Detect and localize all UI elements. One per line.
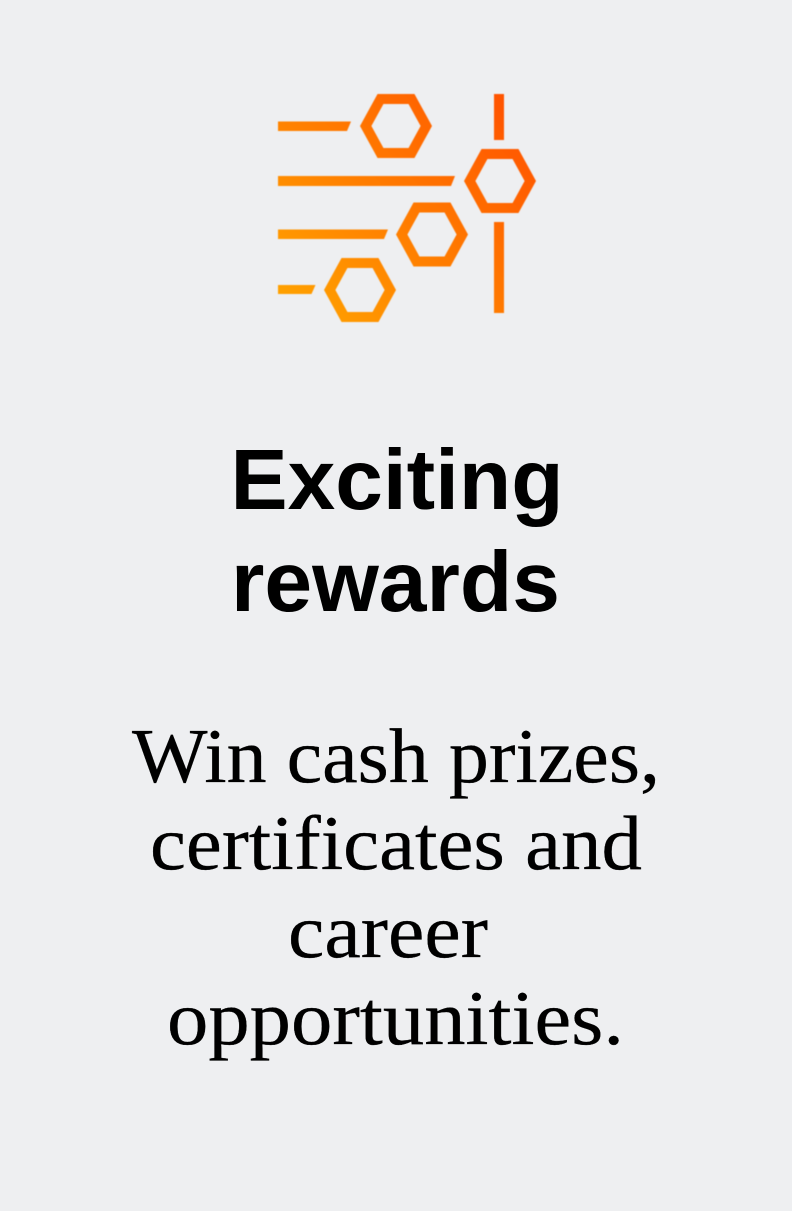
body text: career [288, 888, 488, 974]
body text: opportunities. [167, 975, 624, 1061]
body text: certificates and [150, 800, 642, 886]
body text [132, 713, 660, 1061]
icon: sliders with hexagons [278, 94, 530, 317]
heading: rewards [231, 535, 560, 630]
body text: Win cash prizes, [132, 713, 660, 799]
heading: Exciting [230, 433, 564, 528]
heading [230, 433, 564, 630]
